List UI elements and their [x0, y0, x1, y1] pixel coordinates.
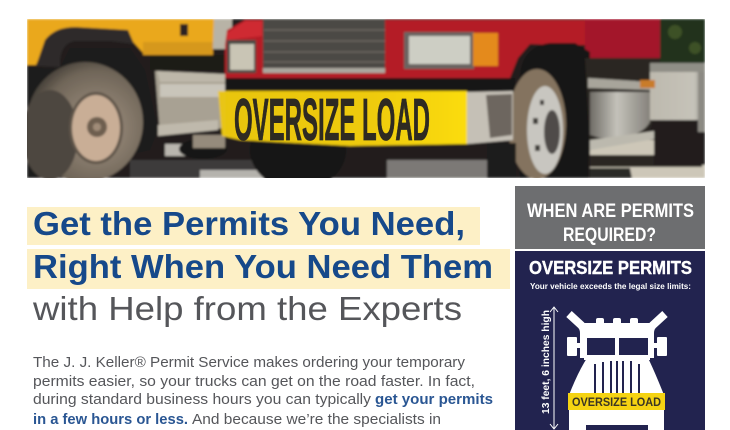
body paragraph: during standard business hours you can typically: [33, 392, 372, 408]
photo: trucks with oversize load banner: [22, 19, 705, 190]
right fender: [520, 43, 590, 178]
windshield: [587, 338, 615, 355]
hood: [569, 358, 664, 430]
panel subtitle: Your vehicle exceeds the legal size limits:: [530, 282, 691, 291]
grey mid background behind yellow truck: [212, 19, 232, 49]
sidebar header panel: [515, 186, 705, 249]
body paragraph: permits easier, so your trucks can get on the road faster. In fact,: [33, 374, 475, 390]
heading highlight line 1: [27, 207, 480, 245]
lower opening: [586, 425, 648, 430]
banner: [218, 91, 467, 146]
icon: truck front: OVERSIZE LOAD: [572, 395, 661, 409]
body paragraph: [33, 355, 493, 428]
heading line 1: Get the Permits You Need,: [33, 205, 465, 242]
oversize load sign: [568, 393, 665, 410]
red cab: [223, 19, 586, 80]
grille: [595, 361, 639, 394]
red truck tire front left: [250, 140, 346, 178]
panel title: OVERSIZE PERMITS: [529, 258, 692, 278]
yellow truck: [27, 19, 214, 65]
yellow truck tire: [27, 62, 143, 182]
fuel tank yellow truck: [155, 71, 225, 134]
ground: [130, 160, 265, 178]
chassis: [585, 58, 660, 150]
right wheel: [508, 69, 566, 179]
body paragraph: And because we’re the specialists in: [192, 412, 441, 428]
right headlight: [404, 32, 474, 69]
sidebar heading: [527, 201, 694, 246]
heading: [32, 205, 493, 327]
heading line 3: with Help from the Experts: [32, 290, 462, 327]
body paragraph: get your permits: [375, 392, 493, 408]
sidebar heading: REQUIRED?: [563, 225, 656, 246]
sidebar heading: WHEN ARE PERMITS: [527, 201, 694, 222]
grille: [263, 19, 385, 72]
foliage: [659, 19, 705, 62]
body paragraph: in a few hours or less.: [33, 412, 188, 428]
exhaust stacks: [569, 314, 665, 358]
heading line 2: Right When You Need Them: [33, 248, 493, 285]
height arrow: [550, 307, 558, 429]
bumper: [467, 91, 513, 144]
cab: [576, 343, 658, 348]
panel: oversize permits: [515, 251, 705, 430]
body paragraph: The J. J. Keller® Permit Service makes ordering your temporary: [33, 355, 466, 371]
icon: truck front: [567, 314, 667, 430]
height label: 13 feet, 6 inches high: [540, 310, 552, 414]
heading highlight line 2: [27, 249, 510, 289]
left headlight: [227, 40, 256, 73]
mirrors: [567, 337, 577, 356]
photo: trucks with oversize load banner: OVERSIZE LOAD: [234, 87, 430, 153]
